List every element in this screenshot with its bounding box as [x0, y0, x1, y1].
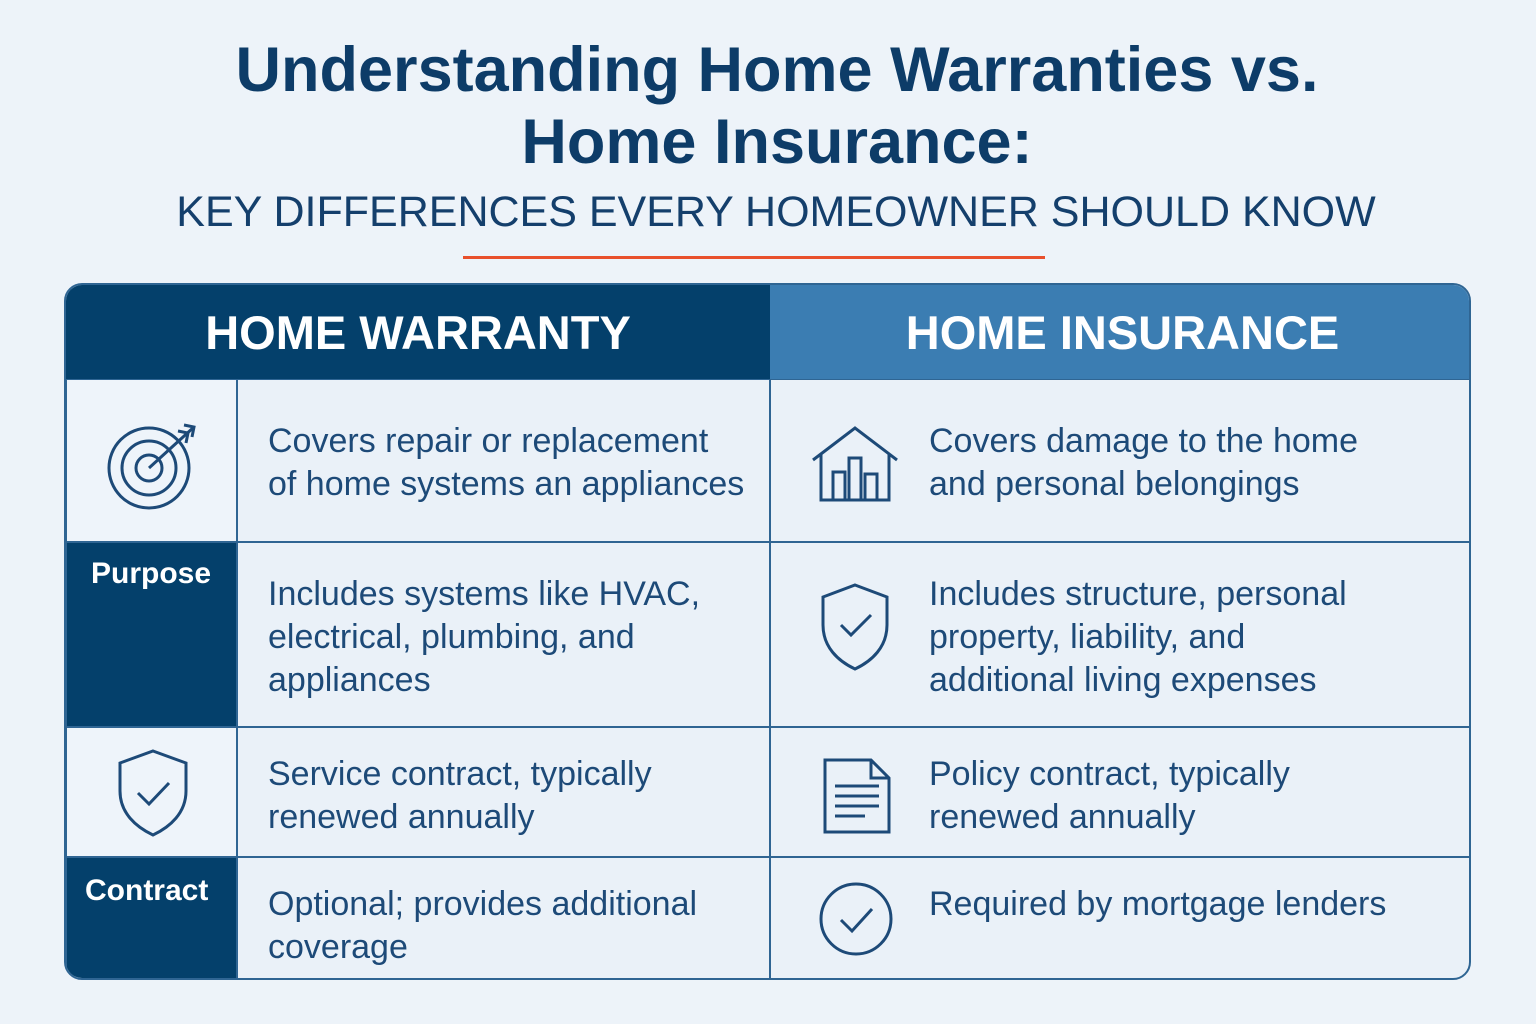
- icon: house: [812, 426, 898, 502]
- label: purpose: Purpose: [91, 557, 211, 590]
- label: purpose: [66, 542, 237, 727]
- icon: document: [824, 758, 890, 834]
- comparison table: [64, 283, 1471, 980]
- label: contract: Contract: [85, 874, 208, 907]
- warranty text cells: Covers repair or replacement: [268, 422, 708, 460]
- icon: shield warranty: [118, 749, 188, 837]
- accent underline: [463, 256, 1045, 259]
- comparison table: Required by mortgage lenders: [929, 885, 1386, 923]
- warranty text cells: [237, 379, 770, 542]
- comparison table: Includes structure, personal: [929, 575, 1347, 613]
- title: Understanding Home Warranties vs.: [236, 35, 1318, 105]
- insurance cells: and personal belongings: [929, 465, 1300, 503]
- title: Home Insurance:: [521, 107, 1033, 177]
- header: home insurance: HOME INSURANCE: [906, 306, 1339, 359]
- comparison table: Service contract, typically: [268, 755, 652, 793]
- header: home warranty: HOME WARRANTY: [205, 306, 631, 359]
- subtitle: KEY DIFFERENCES EVERY HOMEOWNER SHOULD KNOW: [176, 188, 1376, 236]
- comparison table: appliances: [268, 661, 431, 699]
- warranty text cells: of home systems an appliances: [268, 465, 744, 503]
- comparison table: Policy contract, typically: [929, 755, 1290, 793]
- icon: shield insurance: [822, 583, 888, 671]
- label: contract: [66, 857, 237, 982]
- insurance cells: Covers damage to the home: [929, 422, 1358, 460]
- comparison table: coverage: [268, 928, 408, 966]
- header: home warranty: [66, 285, 770, 379]
- comparison table: property, liability, and: [929, 618, 1245, 656]
- comparison table: electrical, plumbing, and: [268, 618, 635, 656]
- header: home insurance: [770, 285, 1475, 379]
- comparison table: Optional; provides additional: [268, 885, 697, 923]
- label column: [66, 379, 237, 978]
- insurance cells: [770, 379, 1475, 542]
- title: [236, 35, 1318, 177]
- icon: check circle: [820, 882, 892, 956]
- comparison table: renewed annually: [268, 798, 535, 836]
- comparison table: renewed annually: [929, 798, 1196, 836]
- icon: target: [108, 424, 196, 510]
- comparison table: additional living expenses: [929, 661, 1316, 699]
- comparison table: Includes systems like HVAC,: [268, 575, 700, 613]
